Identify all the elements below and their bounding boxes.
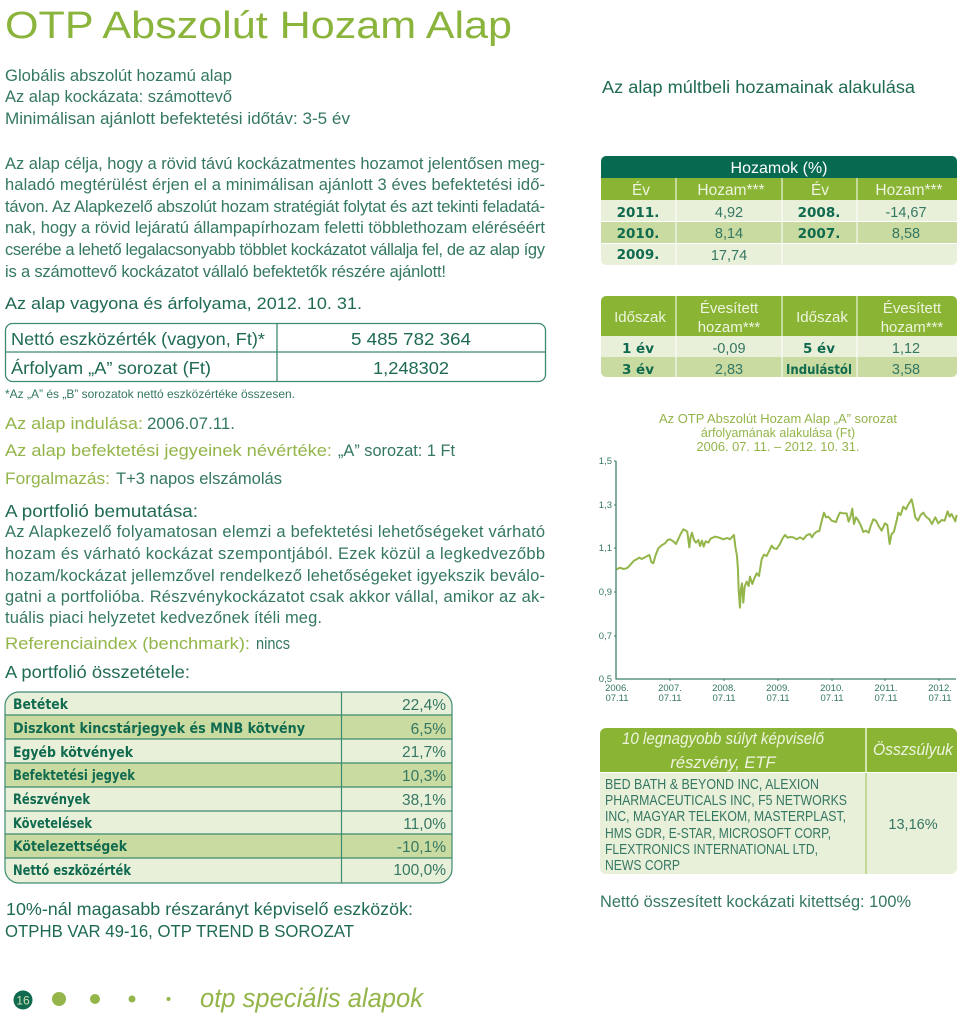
x axis labels: 07.11 — [928, 693, 952, 704]
distribution settlement: Forgalmazás: — [5, 469, 110, 488]
y axis labels: 1,1 — [599, 543, 612, 554]
table: annual returns: 4,92 — [715, 205, 743, 221]
note: holdings above 10% — [5, 899, 413, 941]
portfolio paragraph: Az Alapkezelő folyamatosan elemzi a befektetési lehetőségeket várható — [5, 523, 545, 541]
portfolio paragraph: tuális piaci helyzetet kedvezőnek ítéli meg. — [5, 609, 322, 627]
footer: section name: otp speciális alapok — [200, 983, 424, 1013]
table: portfolio composition: -10,1% — [397, 839, 446, 856]
table: top 10 holdings — [600, 728, 957, 874]
benchmark: Referenciaindex (benchmark): — [5, 634, 250, 653]
table: annual returns: 2011. — [617, 205, 659, 221]
nominal value — [5, 441, 455, 460]
distribution settlement — [5, 469, 282, 488]
table: annualized returns: 3 év — [622, 362, 654, 378]
table: annual returns: Év — [811, 182, 829, 199]
fund objective paragraph — [5, 155, 546, 281]
chart title: árfolyamának alakulása (Ft) — [701, 426, 855, 440]
table: portfolio composition — [5, 692, 452, 883]
chart axes — [614, 461, 956, 681]
table: top 10 holdings: BED BATH & BEYOND INC, ALEXION — [605, 777, 819, 793]
nominal value: „A” sorozat: 1 Ft — [338, 441, 455, 460]
table: annual returns: 8,14 — [715, 226, 743, 242]
table: top 10 holdings: 10 legnagyobb súlyt képviselő — [622, 730, 825, 748]
fund start date: Az alap indulása: — [5, 414, 143, 433]
y axis labels: 1,3 — [599, 500, 612, 511]
table: annualized returns: 2,83 — [715, 362, 743, 378]
table: top 10 holdings: NEWS CORP — [605, 858, 680, 874]
table: portfolio composition: 21,7% — [402, 744, 446, 761]
table: annualized returns: 1,12 — [892, 341, 920, 357]
table: annual returns: Hozamok (%) — [731, 160, 827, 177]
table: annual returns: Hozam*** — [875, 182, 943, 199]
x axis labels: 2010. — [820, 683, 844, 694]
chart title — [659, 412, 898, 454]
table: portfolio composition: Nettó eszközérték — [13, 863, 131, 879]
table: portfolio composition: Részvények — [13, 792, 90, 808]
table: top 10 holdings: részvény, ETF — [670, 754, 776, 772]
chart title: 2006. 07. 11. – 2012. 10. 31. — [696, 440, 860, 454]
portfolio paragraph: hozam és várható kockázat szempontjából. Ezek közül a legkedvezőbb — [5, 545, 545, 563]
heading: portfolio presentation: A portfolió bemutatása: — [5, 501, 198, 521]
table: portfolio composition: Betétek — [13, 697, 68, 713]
x axis labels: 07.11 — [874, 693, 898, 704]
table: annual returns: 2009. — [617, 247, 659, 263]
table: top 10 holdings: FLEXTRONICS INTERNATIONAL LTD, — [605, 842, 818, 858]
table: top 10 holdings: PHARMACEUTICALS INC, F5 NETWORKS — [605, 793, 847, 809]
table: portfolio composition: Egyéb kötvények — [13, 745, 133, 761]
table: annual returns: 17,74 — [711, 248, 747, 264]
portfolio paragraph: gatni a portfolióba. Részvénykockázatot csak akkor vállal, amikor az ak- — [5, 588, 545, 606]
table: annualized returns: 5 év — [803, 341, 835, 357]
title: OTP Abszolút Hozam Alap — [5, 5, 512, 47]
table: top 10 holdings: INC, MAGYAR TELEKOM, MASTERPLAST, — [605, 809, 846, 825]
heading: assets and price: Az alap vagyona és árfolyama, 2012. 10. 31. — [5, 294, 362, 313]
table: portfolio composition: 38,1% — [402, 792, 446, 809]
fund summary text: Az alap kockázata: számottevő — [5, 88, 232, 106]
table: portfolio composition: 22,4% — [402, 697, 446, 714]
x axis labels — [605, 683, 952, 704]
footnote: *Az „A” és „B” sorozatok nettó eszközértéke összesen. — [5, 387, 295, 401]
x axis labels: 2008. — [712, 683, 736, 694]
table: top 10 holdings: HMS GDR, E-STAR, MICROSOFT CORP, — [605, 826, 831, 842]
table: annualized returns: Időszak — [796, 309, 848, 326]
fund objective paragraph: Az alap célja, hogy a rövid távú kockázatmentes hozamot jelentősen meg- — [5, 155, 545, 173]
table: annual returns: 2007. — [798, 226, 840, 242]
table: net asset value and price: Nettó eszközérték (vagyon, Ft)* — [11, 329, 265, 349]
table: net asset value and price: 5 485 782 364 — [351, 329, 471, 349]
table: portfolio composition: Követelések — [13, 816, 92, 832]
x axis labels: 07.11 — [766, 693, 790, 704]
table: annualized returns: hozam*** — [698, 319, 760, 336]
footer: page number — [14, 990, 32, 1010]
x axis labels: 2006. — [605, 683, 629, 694]
portfolio paragraph: hozam/kockázat jellemzővel rendelkező lehetőségeket igyekszik beválo- — [5, 567, 545, 585]
table: annual returns: -14,67 — [885, 205, 927, 221]
table: annual returns: 2008. — [798, 205, 840, 221]
x axis labels: 07.11 — [605, 693, 629, 704]
table: portfolio composition: Diszkont kincstárjegyek és MNB kötvény — [13, 721, 305, 737]
table: portfolio composition: 100,0% — [393, 862, 446, 879]
table: annual returns: Év — [632, 182, 650, 199]
y axis labels: 1,5 — [599, 456, 612, 467]
y axis labels: 0,5 — [599, 674, 612, 685]
fund objective paragraph: nak, hogy a rövid lejáratú állampapírhozam feletti többlethozam eléréséért — [5, 219, 545, 237]
table: annualized returns: Évesített — [883, 300, 942, 317]
fund summary text: Globális abszolút hozamú alap — [5, 67, 232, 85]
table: annual returns: 2010. — [617, 226, 659, 242]
y axis labels: 0,7 — [599, 631, 612, 642]
net risk exposure: Nettó összesített kockázati kitettség: 100% — [600, 892, 911, 911]
fund start date: 2006.07.11. — [147, 414, 235, 433]
table: annualized returns: Időszak — [614, 309, 666, 326]
fund summary text — [5, 67, 351, 128]
section heading: past returns: Az alap múltbeli hozamainak alakulása — [602, 77, 915, 97]
table: net asset value and price — [6, 324, 546, 382]
heading: portfolio composition: A portfolió összetétele: — [5, 662, 190, 682]
x axis labels: 2011. — [874, 683, 898, 694]
table: annualized returns — [601, 296, 957, 378]
footer: page number: 16 — [16, 994, 30, 1008]
x axis labels: 2012. — [928, 683, 952, 694]
price line — [617, 499, 957, 608]
table: portfolio composition: Kötelezettségek — [13, 839, 127, 855]
note: holdings above 10%: 10%-nál magasabb részarányt képviselő eszközök: — [6, 899, 413, 919]
chart title: Az OTP Abszolút Hozam Alap „A” sorozat — [659, 412, 898, 426]
table: portfolio composition: Befektetési jegyek — [13, 768, 135, 784]
fund start date — [5, 414, 235, 433]
table: top 10 holdings: Összsúlyuk — [873, 741, 954, 759]
fund objective paragraph: haladó megtérülést érjen el a minimálisan ajánlott 3 éves befektetési idő- — [5, 176, 545, 194]
table: net asset value and price: 1,248302 — [373, 358, 449, 378]
table: annual returns — [601, 156, 957, 265]
table: annual returns: 8,58 — [892, 226, 920, 242]
benchmark: nincs — [256, 634, 290, 653]
table: portfolio composition: 6,5% — [411, 721, 446, 738]
note: holdings above 10%: OTPHB VAR 49-16, OTP TREND B SOROZAT — [5, 921, 354, 941]
x axis labels: 07.11 — [712, 693, 736, 704]
table: portfolio composition: 11,0% — [403, 816, 446, 833]
x axis labels: 2009. — [766, 683, 790, 694]
x axis labels: 2007. — [658, 683, 682, 694]
fund objective paragraph: távon. Az Alapkezelő abszolút hozam stratégiát folytat és azt tekinti feladatá- — [5, 198, 545, 216]
table: annualized returns: 1 év — [622, 341, 654, 357]
fund objective paragraph: cserébe a lehető legalacsonyabb többlet kockázatot vállalja fel, de az alap így — [5, 241, 546, 259]
table: annualized returns: -0,09 — [712, 341, 746, 357]
table: net asset value and price: Árfolyam „A” sorozat (Ft) — [11, 358, 211, 378]
fund summary text: Minimálisan ajánlott befektetési időtáv: 3-5 év — [5, 110, 351, 128]
portfolio paragraph — [5, 523, 545, 627]
table: annual returns: Hozam*** — [697, 182, 765, 199]
footer: decorative dots — [52, 992, 170, 1006]
y axis labels — [599, 456, 612, 685]
table: annualized returns: hozam*** — [881, 319, 943, 336]
table: annualized returns: Évesített — [700, 300, 759, 317]
fund objective paragraph: is a számottevő kockázatot vállaló befektetők részére ajánlott! — [5, 263, 446, 281]
nominal value: Az alap befektetési jegyeinek névértéke: — [5, 441, 332, 460]
distribution settlement: T+3 napos elszámolás — [116, 469, 282, 488]
x axis labels: 07.11 — [820, 693, 844, 704]
x axis labels: 07.11 — [658, 693, 682, 704]
table: top 10 holdings: 13,16% — [888, 817, 938, 833]
table: portfolio composition: 10,3% — [402, 768, 446, 785]
y axis labels: 0,9 — [599, 587, 612, 598]
line chart: price history — [599, 456, 957, 704]
table: annualized returns: Indulástól — [786, 362, 852, 378]
table: annualized returns: 3,58 — [892, 362, 920, 378]
